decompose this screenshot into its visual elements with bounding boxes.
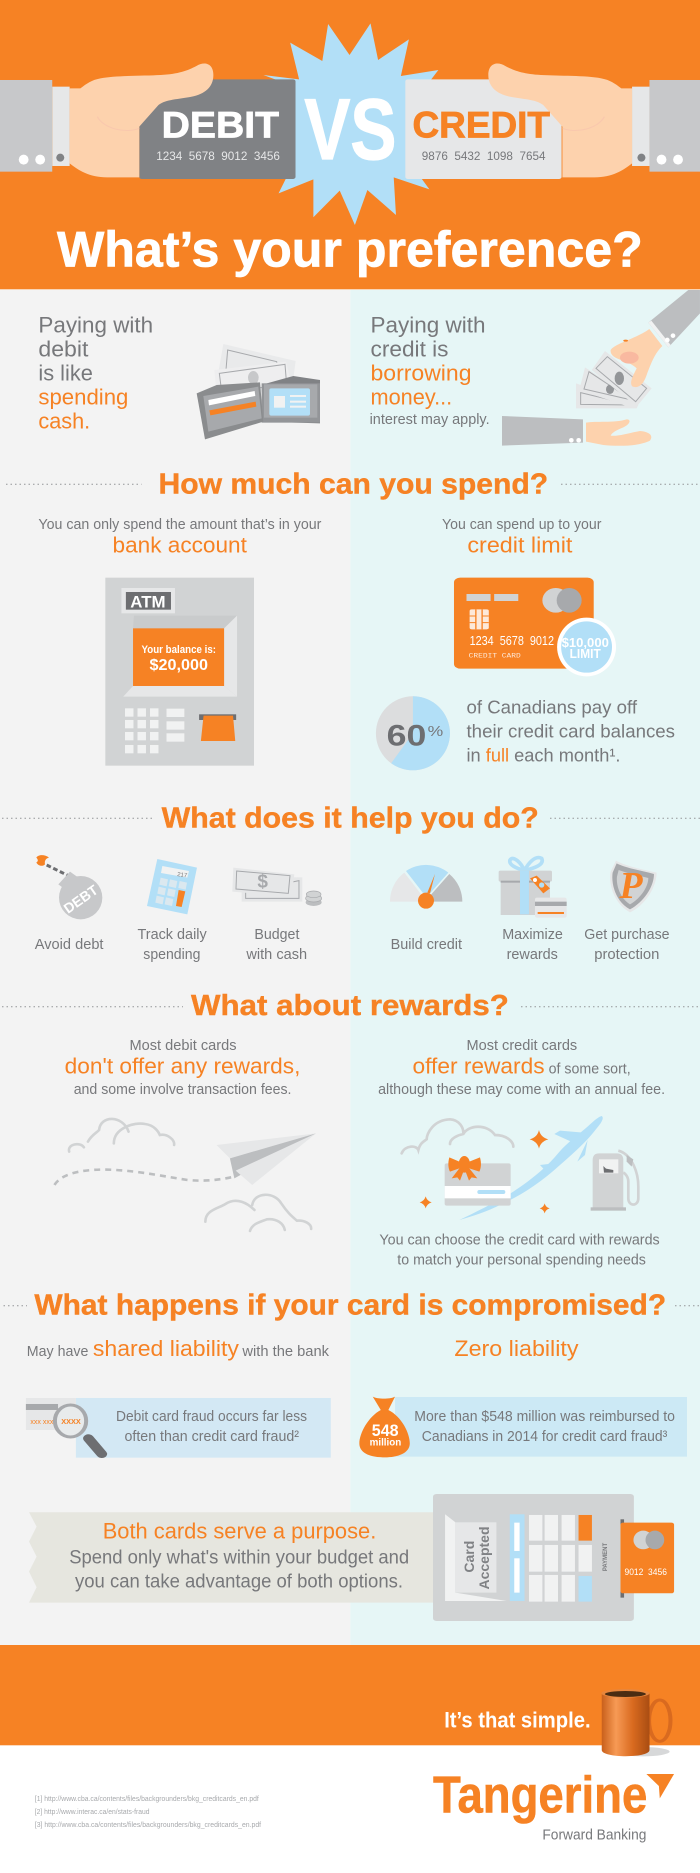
credit number: 9876 5432 1098 7654 [422,149,546,163]
panel: header [0,0,700,289]
label: get purchase protection: protection [594,946,659,963]
icon: right hand and sleeve [488,64,700,177]
pie chart: 60%: % [428,723,443,740]
icon: calculator [147,859,197,914]
icon: calculator: 217 [177,872,188,879]
icon: left hand and sleeve [0,64,213,177]
icon: payment terminal with card: PAYMENT [603,1542,609,1571]
text: credit rewards: offer rewards [412,1053,545,1078]
text: choose rewards card: You can choose the credit card with rewards [379,1231,660,1248]
label: track daily spending: Track daily [138,926,207,943]
icon: credit gauge [390,865,462,909]
text: paying with debit: debit [38,336,88,361]
label: avoid debt: Avoid debt [35,936,104,953]
text: debit rewards [65,1037,300,1098]
icon: credit card with limit badge: CREDIT CARD [469,653,521,660]
label: maximize rewards: Maximize [502,926,563,943]
text: paying with credit: money... [370,384,452,409]
callout: debit fraud [26,1398,331,1458]
text: paying with credit: borrowing [370,360,472,385]
text: paying with debit: Paying with [38,312,153,337]
text: interest may apply: interest may apply. [370,412,490,428]
text: credit rewards [378,1037,665,1098]
label: track daily spending: spending [143,946,200,963]
icon: purchase protection shield: P [618,865,643,907]
heading: what does it help you do: What does it help you do? [162,802,539,834]
text: credit spending limit: credit limit [467,532,572,557]
icon: credit card with limit badge: $10,000 [562,635,609,650]
text: choose rewards card [379,1231,660,1268]
text: paying with debit [38,312,153,433]
icon: gift box with tag and card [499,858,567,918]
text: credit rewards: of some sort, [549,1060,631,1077]
text: paying with credit [370,312,486,409]
panel: debit column background [0,289,350,1645]
section: paying with debit [38,312,320,439]
text: canadians pay off balances [466,696,675,765]
icon: ATM machine [105,578,254,766]
text: credit rewards: although these may come with an annual fee. [378,1081,665,1098]
callout: debit fraud: xxx xxx [30,1419,54,1426]
icon: ATM machine: Your balance is: [142,644,216,656]
callout: debit fraud: Debit card fraud occurs far less [116,1408,307,1425]
heading: how much can you spend: How much can you spend? [158,468,548,500]
section: paying with credit [370,290,700,446]
label: build credit: Build credit [391,936,463,953]
icon: payment terminal with card: Card [461,1541,477,1573]
icon: rewards scene with plane, gift card and gas pump [402,1116,638,1220]
text: shared liability: shared liability [93,1336,239,1361]
VS label: VS [304,82,396,178]
label: maximize rewards: rewards [507,946,558,963]
title: What’s your preference? [57,222,643,278]
text: debit rewards: don't offer any rewards, [65,1053,300,1078]
heading: what about rewards: What about rewards? [191,990,509,1022]
callout: debit fraud: XXXX [61,1417,81,1426]
text: choose rewards card: to match your personal spending needs [397,1251,646,1268]
debit number: 1234 5678 9012 3456 [156,149,280,163]
text: debit spending limit: bank account [112,532,247,557]
text: paying with credit: Paying with [370,312,486,337]
pie chart: 60% [376,696,450,770]
label: budget with cash: Budget [254,926,300,943]
label: track daily spending [138,926,207,963]
text: paying with debit: spending [38,384,128,409]
text: paying with debit: is like [38,360,93,385]
icon: starburst [263,23,438,225]
callout: credit fraud reimbursement: 548 [372,1421,399,1440]
footnotes: [1] http://www.cba.ca/contents/files/backgrounders/bkg_creditcards_en.pdf [35,1796,259,1803]
icon: payment terminal with card: 9012 3456 [624,1567,667,1578]
footnotes [35,1796,261,1829]
label: get purchase protection [584,926,670,963]
logo: Tangerine: Forward Banking [542,1826,646,1843]
icon: cash and coins [232,868,322,906]
callout: credit fraud reimbursement: More than $548 million was reimbursed to [414,1408,675,1425]
icon: credit card with limit badge: 1234 5678 9012 [470,634,554,648]
label: get purchase protection: Get purchase [584,926,670,943]
icon: ATM machine: $20,000 [150,657,208,674]
icon: credit card with limit badge [454,578,616,676]
debit card [139,79,296,179]
banner: both cards serve a purpose: you can take advantage of both options. [75,1571,403,1592]
icon: payment terminal with card: Accepted [476,1526,492,1590]
panel: orange footer band [0,1645,700,1745]
callout: credit fraud reimbursement: million [370,1437,401,1449]
text: debit rewards: and some involve transaction fees. [74,1081,292,1098]
label: budget with cash [245,926,307,963]
footnotes: [2] http://www.interac.ca/en/stats-fraud [35,1809,150,1816]
text: shared liability: May have [27,1343,88,1360]
logo: Tangerine: Tangerine [433,1766,647,1824]
text: credit rewards: Most credit cards [466,1037,577,1054]
icon: bomb: DEBT [61,881,101,916]
banner: both cards serve a purpose: Spend only what's within your budget and [69,1547,409,1568]
text: paying with debit: cash. [38,408,90,433]
label: maximize rewards [502,926,563,963]
text: debit rewards: Most debit cards [130,1037,236,1054]
text: credit spending limit [442,516,601,557]
callout: credit fraud reimbursement: Canadians in 2014 for credit card fraud³ [422,1428,667,1445]
text: zero liability: Zero liability [454,1336,578,1361]
panel: credit column background [350,289,700,1645]
label: budget with cash: with cash [245,946,307,963]
text: credit spending limit: You can spend up to your [442,516,601,533]
heading: what happens if your card is compromised: What happens if your card is compromised? [34,1289,666,1321]
text: it's that simple: It’s that simple. [444,1707,591,1732]
banner: both cards serve a purpose: Both cards serve a purpose. [103,1519,376,1544]
footnotes: [3] http://www.cba.ca/contents/files/backgrounders/bkg_creditcards_en.pdf [35,1822,261,1829]
icon: purchase protection shield [610,861,657,912]
icon: cash and coins: $ [257,872,268,893]
text: shared liability [27,1336,329,1361]
icon: hands passing money [502,290,700,446]
callout: credit fraud reimbursement [359,1397,687,1457]
banner: both cards serve a purpose [29,1512,435,1603]
text: canadians pay off balances: their credit card balances [466,720,675,741]
icon: paper plane with clouds [54,1119,316,1231]
debit label: DEBIT [162,104,279,146]
text: canadians pay off balances: of Canadians pay off [466,696,638,717]
icon: orange mug [601,1689,670,1756]
icon: credit card with limit badge: LIMIT [570,646,601,661]
callout: debit fraud: often than credit card fraud² [124,1428,299,1445]
credit label: CREDIT [412,104,550,146]
text: canadians pay off balances: in full each month¹. [466,744,620,765]
icon: wallet with bills [197,344,320,439]
icon: payment terminal with card [433,1494,674,1621]
text: debit spending limit [38,516,321,557]
text: paying with credit: credit is [370,336,448,361]
text: debit spending limit: You can only spend the amount that’s in your [38,516,321,533]
text: shared liability: with the bank [241,1343,329,1360]
credit card [405,79,562,179]
icon: ATM machine: ATM [130,592,166,611]
icon: bomb [36,855,102,919]
pie chart: 60%: 60 [387,720,426,753]
